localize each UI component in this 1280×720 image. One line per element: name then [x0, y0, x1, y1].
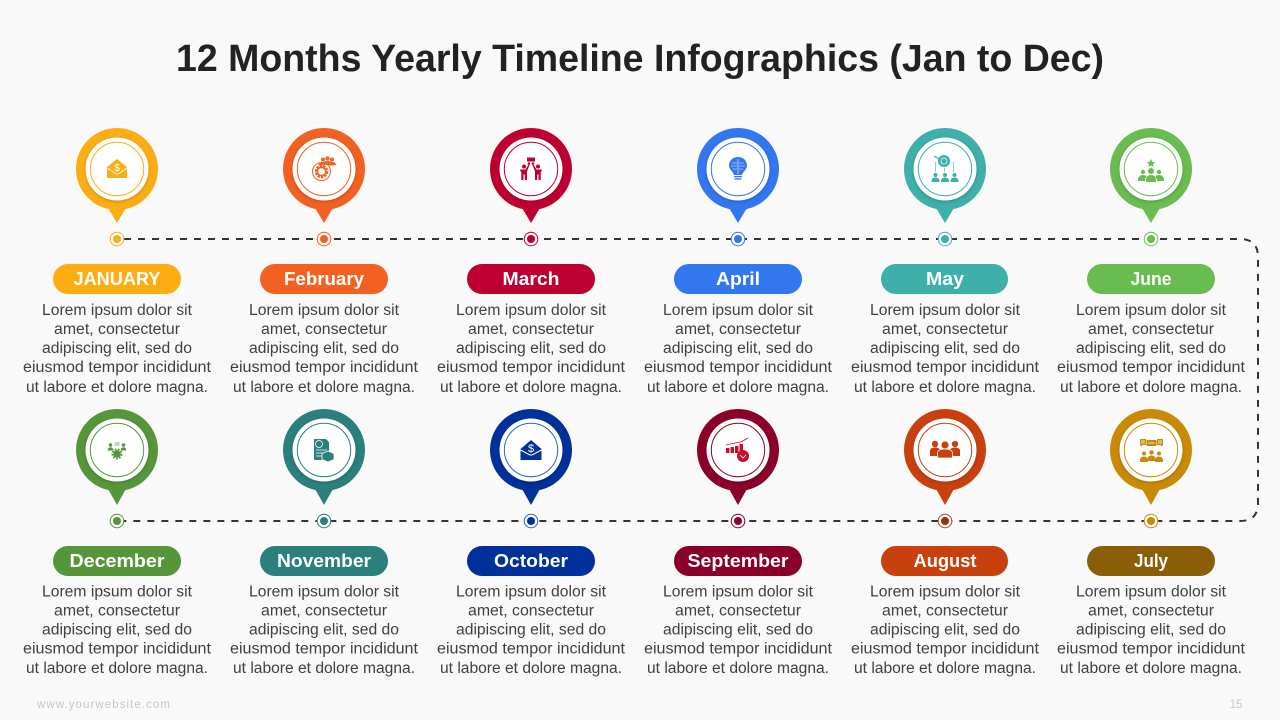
icon: three business people [930, 441, 960, 458]
description: February: eiusmod tempor incididunt [230, 359, 419, 376]
timeline dot: June [1144, 232, 1158, 246]
pin: November [283, 409, 365, 505]
timeline dot: November [317, 514, 331, 528]
description: December: Lorem ipsum dolor sit [42, 584, 193, 600]
column: January [23, 128, 212, 396]
description: February: adipiscing elit, sed do [249, 340, 399, 357]
pin: July [1110, 409, 1192, 505]
column: April [644, 128, 833, 396]
description: June: ut labore et dolore magna. [1060, 379, 1242, 396]
description: July: amet, consectetur [1088, 602, 1214, 620]
month label: August: August [914, 551, 976, 571]
description: January: Lorem ipsum dolor sit [42, 302, 193, 319]
description: December [23, 584, 212, 677]
description: July [1057, 584, 1246, 677]
description: December: amet, consectetur [54, 602, 180, 620]
icon: envelope with dollar: $ [114, 163, 120, 174]
icon: team with star [1138, 159, 1164, 182]
description: April: amet, consectetur [675, 321, 801, 338]
description: November: ut labore et dolore magna. [233, 660, 415, 677]
description: January: amet, consectetur [54, 321, 180, 338]
timeline dot: April [731, 232, 745, 246]
pin: April [697, 128, 779, 223]
month label: February [260, 264, 388, 294]
month label: December: December [70, 551, 164, 571]
description: October: adipiscing elit, sed do [456, 622, 606, 638]
dashed timeline path [124, 239, 1258, 521]
icon: speech boards and three people [1140, 439, 1163, 462]
icon: target and three people [932, 155, 958, 182]
description: July: Lorem ipsum dolor sit [1076, 584, 1227, 600]
description: February: amet, consectetur [261, 321, 387, 338]
column: May [851, 128, 1040, 396]
description: June [1057, 302, 1246, 396]
description: December: adipiscing elit, sed do [42, 622, 192, 638]
month label: January: JANUARY [74, 269, 160, 289]
icon: envelope with dollar: $ [528, 443, 534, 455]
timeline dot: September [731, 514, 745, 528]
description: September: Lorem ipsum dolor sit [663, 584, 814, 600]
description: March: ut labore et dolore magna. [440, 379, 622, 396]
description: April: ut labore et dolore magna. [647, 379, 829, 396]
description: January: ut labore et dolore magna. [26, 379, 208, 396]
month label: October: October [494, 551, 568, 571]
icon: gear and team [312, 156, 336, 180]
column: June [1057, 128, 1246, 396]
column: October [437, 409, 626, 677]
description: September: adipiscing elit, sed do [663, 622, 813, 638]
description: June: amet, consectetur [1088, 321, 1214, 338]
description: February: ut labore et dolore magna. [233, 379, 415, 396]
description: October: ut labore et dolore magna. [440, 660, 622, 677]
footer website: www.yourwebsite.com [36, 699, 170, 711]
month label: April [674, 264, 802, 294]
description: February: Lorem ipsum dolor sit [249, 302, 400, 319]
description: March: amet, consectetur [468, 321, 594, 338]
icon: two people with speech bubble [520, 158, 542, 180]
month label: May: May [926, 269, 964, 289]
description: March: Lorem ipsum dolor sit [456, 302, 607, 319]
pin: December [76, 409, 158, 505]
icon: bar chart with arrow and badge [726, 438, 749, 462]
description: December: eiusmod tempor incididunt [23, 640, 212, 658]
month label: December [53, 546, 181, 576]
description: July: eiusmod tempor incididunt [1057, 640, 1246, 658]
title: 12 Months Yearly Timeline Infographics (Jan to Dec) [176, 38, 1104, 80]
timeline dot: August [938, 514, 952, 528]
description: August: amet, consectetur [882, 602, 1008, 620]
description: July: ut labore et dolore magna. [1060, 660, 1242, 677]
description: August: eiusmod tempor incididunt [851, 640, 1040, 658]
column: December [23, 409, 212, 677]
description: November: eiusmod tempor incididunt [230, 640, 419, 658]
month label: October [467, 546, 595, 576]
pin: February [283, 128, 365, 223]
description: April: eiusmod tempor incididunt [644, 359, 833, 376]
timeline dot: January [110, 232, 124, 246]
description: November: Lorem ipsum dolor sit [249, 584, 400, 600]
description: May: adipiscing elit, sed do [870, 340, 1020, 357]
description: January: adipiscing elit, sed do [42, 340, 192, 357]
description: July: adipiscing elit, sed do [1076, 622, 1226, 638]
description: April: Lorem ipsum dolor sit [663, 302, 814, 319]
description: June: Lorem ipsum dolor sit [1076, 302, 1227, 319]
description: March: eiusmod tempor incididunt [437, 359, 626, 376]
description: September: ut labore et dolore magna. [647, 660, 829, 677]
pin: March [490, 128, 572, 223]
timeline dot: July [1144, 514, 1158, 528]
description: October: eiusmod tempor incididunt [437, 640, 626, 658]
pin: May [904, 128, 986, 223]
icon: brain light bulb [729, 157, 747, 180]
description: September [644, 584, 833, 677]
description: August: Lorem ipsum dolor sit [870, 584, 1021, 600]
timeline dot: February [317, 232, 331, 246]
description: November [230, 584, 419, 677]
month label: July [1087, 546, 1215, 576]
description: August: ut labore et dolore magna. [854, 660, 1036, 677]
description: December: ut labore et dolore magna. [26, 660, 208, 677]
month label: April: April [716, 269, 760, 289]
column: March [437, 128, 626, 396]
description: September: amet, consectetur [675, 602, 801, 620]
month label: August [881, 546, 1008, 576]
pin: January [76, 128, 158, 223]
month label: June: June [1130, 269, 1172, 289]
description: April: adipiscing elit, sed do [663, 340, 813, 357]
description: October: Lorem ipsum dolor sit [456, 584, 607, 600]
timeline dot: October [524, 514, 538, 528]
pin: August [904, 409, 986, 505]
month label: June [1087, 264, 1215, 294]
month label: February: February [284, 269, 364, 289]
description: January [23, 302, 212, 396]
month label: July: July [1134, 551, 1168, 571]
description: April [644, 302, 833, 396]
pin: June [1110, 128, 1192, 223]
month label: March [467, 264, 595, 294]
description: August: adipiscing elit, sed do [870, 622, 1020, 638]
description: October: amet, consectetur [468, 602, 594, 620]
column: November [230, 409, 419, 677]
month label: September: September [688, 551, 788, 571]
icon: two people and gear [108, 443, 126, 459]
page number: 15 [1230, 699, 1242, 711]
description: February [230, 302, 419, 396]
description: June: eiusmod tempor incididunt [1057, 359, 1246, 376]
description: May: eiusmod tempor incididunt [851, 359, 1040, 376]
month label: May [881, 264, 1008, 294]
timeline dot: March [524, 232, 538, 246]
description: May: Lorem ipsum dolor sit [870, 302, 1021, 319]
pin: October [490, 409, 572, 505]
description: May: ut labore et dolore magna. [854, 379, 1036, 396]
icon: document and box [314, 439, 334, 462]
description: November: adipiscing elit, sed do [249, 622, 399, 638]
month label: September [674, 546, 802, 576]
column: February [230, 128, 419, 396]
description: May: amet, consectetur [882, 321, 1008, 338]
description: October [437, 584, 626, 677]
description: January: eiusmod tempor incididunt [23, 359, 212, 376]
timeline dot: December [110, 514, 124, 528]
timeline dot: May [938, 232, 952, 246]
description: August [851, 584, 1040, 677]
description: May [851, 302, 1040, 396]
description: June: adipiscing elit, sed do [1076, 340, 1226, 357]
month label: March: March [502, 269, 560, 289]
month label: November [260, 546, 388, 576]
description: March [437, 302, 626, 396]
month label: January [53, 264, 181, 294]
column: July [1057, 409, 1246, 677]
pin: September [697, 409, 779, 505]
column: September [644, 409, 833, 677]
description: September: eiusmod tempor incididunt [644, 640, 833, 658]
description: November: amet, consectetur [261, 602, 387, 620]
column: August [851, 409, 1040, 677]
month label: November: November [277, 551, 371, 571]
description: March: adipiscing elit, sed do [456, 340, 606, 357]
